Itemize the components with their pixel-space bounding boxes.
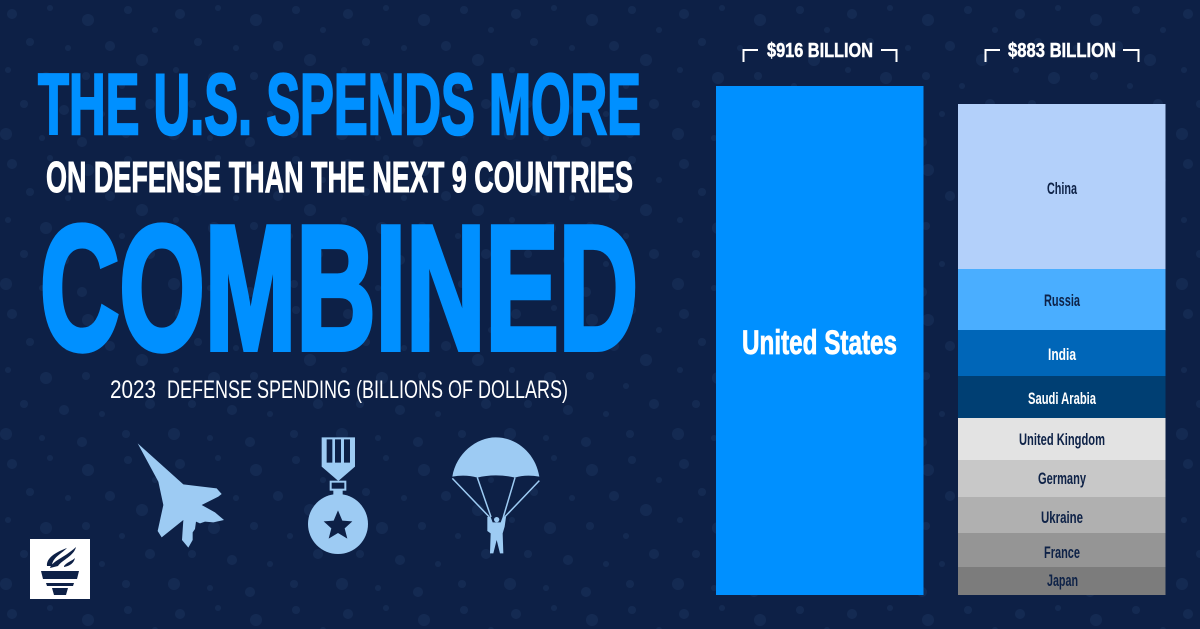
headline line 2: ON DEFENSE THAN THE NEXT 9 COUNTRIES <box>46 153 633 202</box>
segment: Japan <box>958 567 1166 595</box>
segment: United Kingdom <box>958 418 1166 460</box>
segment: India <box>958 330 1166 376</box>
segment: China: China <box>1047 179 1077 198</box>
logo: torch <box>30 539 90 599</box>
segment: United Kingdom: United Kingdom <box>1019 430 1105 449</box>
segment: Ukraine: Ukraine <box>1041 508 1083 527</box>
segment: Ukraine <box>958 497 1166 533</box>
segment: China <box>958 104 1166 269</box>
title: headline <box>38 57 641 387</box>
icon: fighter jet <box>138 443 224 548</box>
stacked bar: next 9 countries <box>958 104 1166 595</box>
subtitle: DEFENSE SPENDING (BILLIONS OF DOLLARS) <box>167 376 568 404</box>
subtitle: 2023 <box>110 376 156 404</box>
segment: Saudi Arabia: Saudi Arabia <box>1028 389 1096 408</box>
segment: Germany <box>958 460 1166 497</box>
segment: France: France <box>1044 543 1080 562</box>
label: United States: United States <box>742 324 897 362</box>
total label: United States: $916 BILLION <box>767 39 873 62</box>
icon: medal <box>308 437 368 554</box>
headline line 1: THE U.S. SPENDS MORE <box>38 57 641 153</box>
segment: Saudi Arabia <box>958 376 1166 418</box>
segment: Russia: Russia <box>1044 291 1080 310</box>
segment: India: India <box>1048 345 1076 364</box>
segment: France <box>958 533 1166 567</box>
icon: parachute <box>452 437 539 553</box>
segment: Japan: Japan <box>1047 571 1078 590</box>
headline line 3: COMBINED <box>40 189 638 387</box>
subtitle <box>110 376 568 404</box>
segment: Russia <box>958 269 1166 330</box>
total label: next 9 countries: $883 BILLION <box>1008 39 1116 62</box>
segment: Germany: Germany <box>1038 469 1086 488</box>
bar: United States <box>716 86 924 595</box>
